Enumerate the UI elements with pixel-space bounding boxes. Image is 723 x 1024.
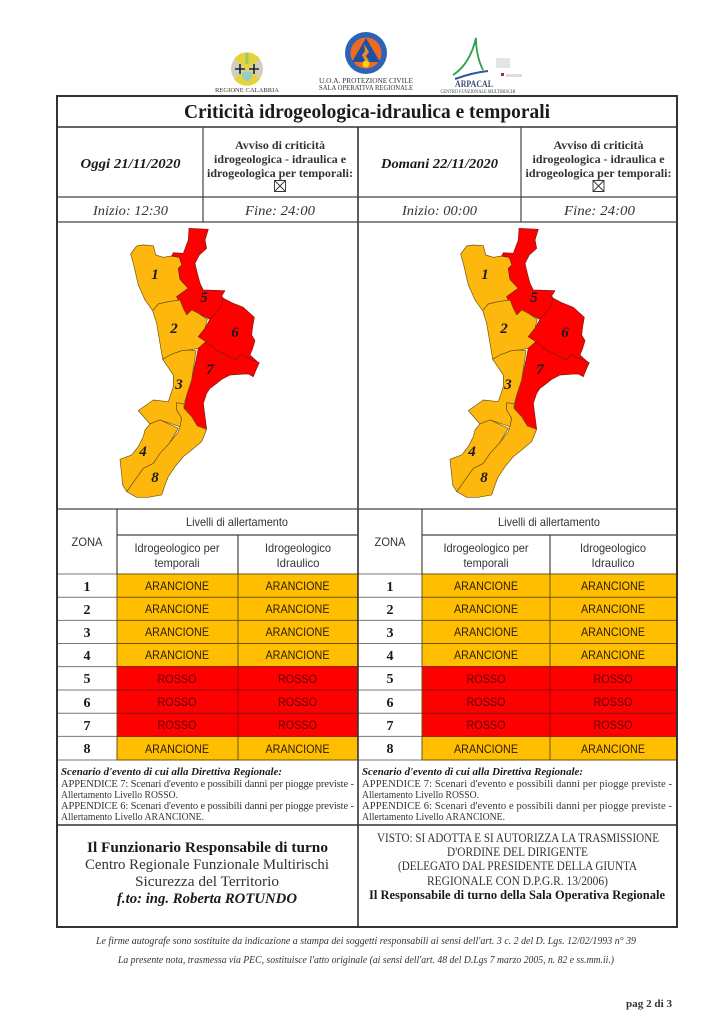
header: today: [80, 138, 353, 219]
alert table: today: Idrogeologico per: [134, 541, 220, 555]
alert table: today: [57, 515, 358, 760]
scenario text: tomorrow: [362, 766, 672, 823]
header: today: idrogeologica - idraulica e: [214, 152, 347, 166]
alert table: tomorrow: ARANCIONE: [581, 742, 645, 756]
header: tomorrow: idrogeologica per temporali:: [526, 166, 672, 180]
scenario text: today: Allertamento Livello ARANCIONE.: [61, 812, 204, 823]
alert table: today: ROSSO: [158, 718, 196, 732]
alert table: tomorrow: 5: [386, 672, 394, 687]
header: tomorrow: Domani 22/11/2020: [380, 157, 498, 172]
logo: ARPACAL: [440, 38, 522, 95]
scenario text: tomorrow: Allertamento Livello ARANCIONE.: [362, 812, 505, 823]
signature: responsible officer: Centro Regionale Funzionale Multirischi: [85, 857, 329, 873]
alert table: tomorrow: ARANCIONE: [581, 579, 645, 593]
alert table: today: ROSSO: [158, 695, 196, 709]
alert table: tomorrow: ARANCIONE: [454, 579, 518, 593]
footnotes: [95, 936, 636, 966]
map: tomorrow: 5: [530, 290, 538, 306]
alert table: tomorrow: 3: [386, 626, 394, 641]
alert table: tomorrow: 6: [386, 696, 394, 711]
alert table: tomorrow: ARANCIONE: [454, 625, 518, 639]
header: today: Fine: 24:00: [244, 204, 315, 219]
alert table: tomorrow: ROSSO: [594, 718, 632, 732]
scenario text: tomorrow: APPENDICE 6: Scenari d'evento e possibili danni per piogge previste -: [362, 801, 672, 812]
map: tomorrow: 7: [536, 362, 544, 378]
signature: responsible officer: Il Funzionario Responsabile di turno: [87, 840, 328, 856]
alert table: tomorrow: Livelli di allertamento: [498, 515, 600, 529]
alert table: today: ARANCIONE: [145, 602, 209, 616]
alert table: today: ARANCIONE: [266, 602, 330, 616]
logo: ARPACAL: CENTRO FUNZIONALE MULTIRISCHI: [440, 90, 516, 95]
alert table: tomorrow: ARANCIONE: [454, 648, 518, 662]
alert table: tomorrow: ROSSO: [594, 672, 632, 686]
signature: responsible officer: [85, 840, 329, 907]
signature: responsible officer: Sicurezza del Territorio: [135, 874, 279, 890]
map: today: 1: [151, 267, 159, 283]
alert table: today: ARANCIONE: [145, 579, 209, 593]
header: today: Oggi 21/11/2020: [80, 157, 180, 172]
alert table: tomorrow: 4: [386, 649, 394, 664]
header: tomorrow: Fine: 24:00: [563, 204, 635, 219]
alert table: tomorrow: Idraulico: [592, 556, 635, 570]
alert table: today: 6: [84, 696, 90, 711]
map: today: 8: [151, 470, 159, 486]
alert table: today: ARANCIONE: [266, 742, 330, 756]
signature: operations room: [369, 830, 665, 902]
alert table: tomorrow: ARANCIONE: [454, 742, 518, 756]
header: tomorrow: [380, 138, 672, 219]
alert table: today: 4: [84, 649, 90, 664]
title: Criticità idrogeologica-idraulica e temporali: [184, 102, 551, 123]
logo: Protezione Civile: [319, 32, 413, 92]
signature: operations room: (DELEGATO DAL PRESIDENTE DELLA GIUNTA: [398, 858, 638, 873]
alert table: today: 5: [84, 672, 90, 687]
alert table: tomorrow: ARANCIONE: [454, 602, 518, 616]
alert table: today: temporali: [154, 556, 200, 570]
map: tomorrow: [450, 228, 589, 497]
map: today: 7: [206, 362, 214, 378]
alert table: tomorrow: Idrogeologico per: [444, 541, 528, 555]
signature: operations room: Il Responsabile di turno della Sala Operativa Regionale: [369, 887, 665, 902]
map: tomorrow: 1: [481, 267, 489, 283]
header: tomorrow: idrogeologica - idraulica e: [532, 152, 665, 166]
header: today: idrogeologica per temporali:: [207, 166, 353, 180]
alert table: today: ARANCIONE: [145, 648, 209, 662]
scenario text: tomorrow: Scenario d'evento di cui alla Direttiva Regionale:: [362, 766, 583, 778]
alert table: tomorrow: ROSSO: [466, 718, 506, 732]
map: tomorrow: 6: [561, 325, 569, 341]
alert table: today: Idrogeologico: [265, 541, 331, 555]
alert table: tomorrow: ARANCIONE: [581, 602, 645, 616]
logo: Protezione Civile: SALA OPERATIVA REGIONALE: [319, 84, 413, 92]
alert table: today: Livelli di allertamento: [186, 515, 288, 529]
map: today: [120, 228, 259, 497]
signature: responsible officer: f.to: ing. Roberta ROTUNDO: [117, 891, 297, 907]
map: tomorrow: 8: [480, 470, 488, 486]
alert table: today: ARANCIONE: [266, 579, 330, 593]
alert table: today: ARANCIONE: [266, 648, 330, 662]
map: today: 6: [231, 325, 239, 341]
alert table: tomorrow: 2: [386, 603, 394, 618]
alert table: today: 7: [84, 719, 90, 734]
logo: Regione Calabria: [215, 52, 279, 94]
scenario text: today: Allertamento Livello ROSSO.: [61, 790, 178, 801]
map: today: 5: [200, 290, 208, 306]
map: tomorrow: 4: [467, 444, 476, 460]
scenario text: tomorrow: Allertamento Livello ROSSO.: [362, 790, 479, 801]
alert table: tomorrow: 1: [386, 580, 394, 595]
alert table: tomorrow: ROSSO: [466, 695, 506, 709]
header: tomorrow: Inizio: 00:00: [401, 204, 477, 219]
signature: operations room: VISTO: SI ADOTTA E SI AUTORIZZA LA TRASMISSIONE: [377, 830, 659, 845]
scenario text: today: Scenario d'evento di cui alla Direttiva Regionale:: [61, 766, 282, 778]
alert table: tomorrow: 7: [386, 719, 394, 734]
alert table: tomorrow: ARANCIONE: [581, 648, 645, 662]
alert table: tomorrow: ROSSO: [594, 695, 632, 709]
alert table: today: ARANCIONE: [266, 625, 330, 639]
map: tomorrow: 3: [503, 377, 512, 393]
alert table: tomorrow: ARANCIONE: [581, 625, 645, 639]
header: tomorrow: Avviso di criticità: [554, 138, 644, 152]
alert table: today: 3: [84, 626, 90, 641]
scenario text: tomorrow: APPENDICE 7: Scenari d'evento e possibili danni per piogge previste -: [362, 779, 672, 790]
alert table: today: ROSSO: [278, 718, 317, 732]
footnotes: La presente nota, trasmessa via PEC, sostituisce l'atto originale (ai sensi dell'art. 48 del D.Lgs 7 marzo 2005, n. 82 e ss.mm.ii.): [117, 955, 615, 966]
map: today: 3: [174, 377, 183, 393]
main table frame: [57, 96, 677, 927]
alert table: today: Idraulico: [276, 556, 320, 570]
alert table: today: ROSSO: [158, 672, 196, 686]
map: today: 4: [138, 444, 147, 460]
scenario text: today: [61, 766, 354, 823]
signature: operations room: REGIONALE CON D.P.G.R. 13/2006): [427, 873, 608, 888]
page number: pag 2 di 3: [626, 998, 672, 1010]
alert table: today: ARANCIONE: [145, 742, 209, 756]
alert table: tomorrow: 8: [386, 742, 394, 757]
alert table: today: ARANCIONE: [145, 625, 209, 639]
alert table: tomorrow: [358, 515, 677, 760]
alert table: today: 2: [84, 603, 90, 618]
logo: ARPACAL: ARPACAL: [455, 80, 493, 90]
alert table: tomorrow: Idrogeologico: [580, 541, 646, 555]
map: today: 2: [169, 321, 178, 337]
alert table: today: ZONA: [72, 535, 102, 549]
alert table: today: 1: [84, 580, 90, 595]
alert table: tomorrow: temporali: [464, 556, 508, 570]
logo: Protezione Civile: U.O.A. PROTEZIONE CIVILE: [319, 77, 413, 85]
alert table: today: 8: [84, 742, 90, 757]
signature: operations room: D'ORDINE DEL DIRIGENTE: [447, 844, 588, 859]
scenario text: today: APPENDICE 7: Scenari d'evento e possibili danni per piogge previste -: [61, 779, 354, 790]
alert table: today: ROSSO: [278, 672, 317, 686]
header: today: Inizio: 12:30: [92, 204, 168, 219]
header: today: Avviso di criticità: [235, 138, 325, 152]
footnotes: Le firme autografe sono sostituite da indicazione a stampa dei soggetti responsabili ai sensi dell'art. 3 c. 2 del D. Lgs. 12/02/1993 n° 39: [95, 936, 636, 947]
scenario text: today: APPENDICE 6: Scenari d'evento e possibili danni per piogge previste -: [61, 801, 354, 812]
logo: Regione Calabria: REGIONE CALABRIA: [215, 87, 279, 94]
alert table: tomorrow: ZONA: [374, 535, 406, 549]
alert table: tomorrow: ROSSO: [466, 672, 506, 686]
alert table: today: ROSSO: [278, 695, 317, 709]
map: tomorrow: 2: [499, 321, 508, 337]
